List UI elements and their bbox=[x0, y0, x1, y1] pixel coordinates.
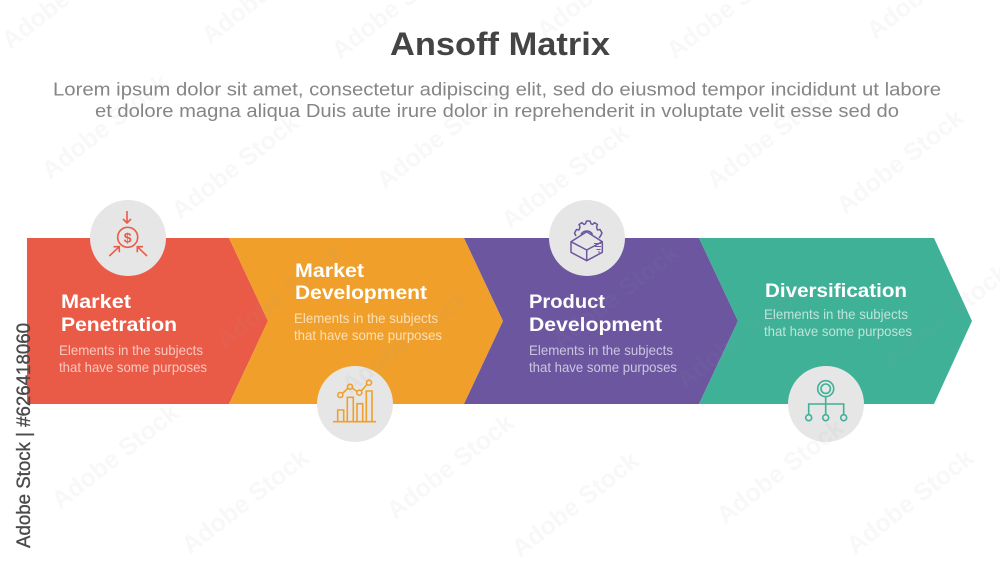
heading: product development: Development bbox=[529, 315, 663, 336]
title: Ansoff Matrix bbox=[390, 26, 610, 62]
heading: product development: Product bbox=[529, 292, 606, 313]
stock watermark pattern: Adobe Stock bbox=[176, 444, 314, 560]
stock watermark pattern: Adobe Stock bbox=[841, 444, 979, 560]
side credit text: Adobe Stock | #626418060 bbox=[14, 323, 35, 548]
stock watermark pattern: Adobe Stock bbox=[381, 409, 519, 525]
icon: hierarchy tree bbox=[788, 366, 864, 442]
icon: coin with inward arrows: $ bbox=[124, 230, 132, 246]
heading: product development bbox=[529, 292, 663, 336]
description: product development: Elements in the subjects bbox=[529, 342, 673, 358]
description: market penetration: Elements in the subjects bbox=[59, 342, 203, 358]
stock watermark pattern: Adobe Stock bbox=[831, 104, 969, 220]
heading: market penetration bbox=[61, 292, 177, 336]
stock watermark pattern: Adobe Stock bbox=[671, 279, 809, 395]
description: product development: that have some purposes bbox=[529, 359, 677, 375]
intro paragraph: et dolore magna aliqua Duis aute irure dolor in reprehenderit in voluptate velit esse sed do bbox=[95, 101, 899, 121]
description: market penetration: that have some purposes bbox=[59, 359, 207, 375]
icon: bar chart with trend line bbox=[317, 366, 393, 442]
stock watermark pattern: Adobe Stock bbox=[166, 109, 304, 225]
panel: market penetration bbox=[27, 238, 268, 404]
panel: product development bbox=[464, 238, 738, 404]
stock watermark pattern: Adobe Stock bbox=[546, 239, 684, 355]
heading: market development: Development bbox=[295, 283, 428, 304]
description: market development: Elements in the subjects bbox=[294, 310, 438, 326]
heading: market penetration: Penetration bbox=[61, 315, 177, 336]
heading: diversification: Diversification bbox=[765, 281, 907, 302]
icon: gear and box bbox=[549, 200, 625, 276]
description: market development: that have some purposes bbox=[294, 327, 442, 343]
stock watermark pattern: Adobe Stock bbox=[36, 69, 174, 185]
stock watermark pattern: Adobe Stock bbox=[711, 414, 849, 530]
orange arrow segment bbox=[229, 238, 503, 404]
stock watermark pattern: Adobe Stock bbox=[496, 119, 634, 235]
stock watermark pattern: Adobe Stock bbox=[371, 79, 509, 195]
stock watermark pattern: Adobe Stock bbox=[506, 447, 644, 563]
intro paragraph: Lorem ipsum dolor sit amet, consectetur adipiscing elit, sed do eiusmod tempor incididunt ut labore bbox=[53, 80, 941, 100]
icon: coin with inward arrows bbox=[90, 200, 166, 276]
heading: market penetration: Market bbox=[61, 292, 132, 313]
description: diversification: Elements in the subjects bbox=[764, 306, 908, 322]
red arrow segment bbox=[27, 238, 268, 404]
description: diversification bbox=[764, 306, 912, 339]
description: diversification: that have some purposes bbox=[764, 323, 912, 339]
stock watermark pattern: Adobe Stock bbox=[701, 79, 839, 195]
description: market development bbox=[294, 310, 442, 343]
stock watermark pattern: Adobe Stock bbox=[46, 399, 184, 515]
heading: market development bbox=[295, 261, 428, 304]
stock watermark pattern: Adobe Stock bbox=[336, 284, 474, 400]
stock watermark pattern: Adobe Stock bbox=[211, 239, 349, 355]
heading: market development: Market bbox=[295, 261, 365, 282]
purple arrow segment bbox=[464, 238, 738, 404]
description: product development bbox=[529, 342, 677, 375]
intro paragraph bbox=[53, 80, 941, 121]
description: market penetration bbox=[59, 342, 207, 375]
panel: market development bbox=[229, 238, 503, 404]
panel: diversification bbox=[699, 238, 972, 404]
teal arrow head segment bbox=[699, 238, 972, 404]
